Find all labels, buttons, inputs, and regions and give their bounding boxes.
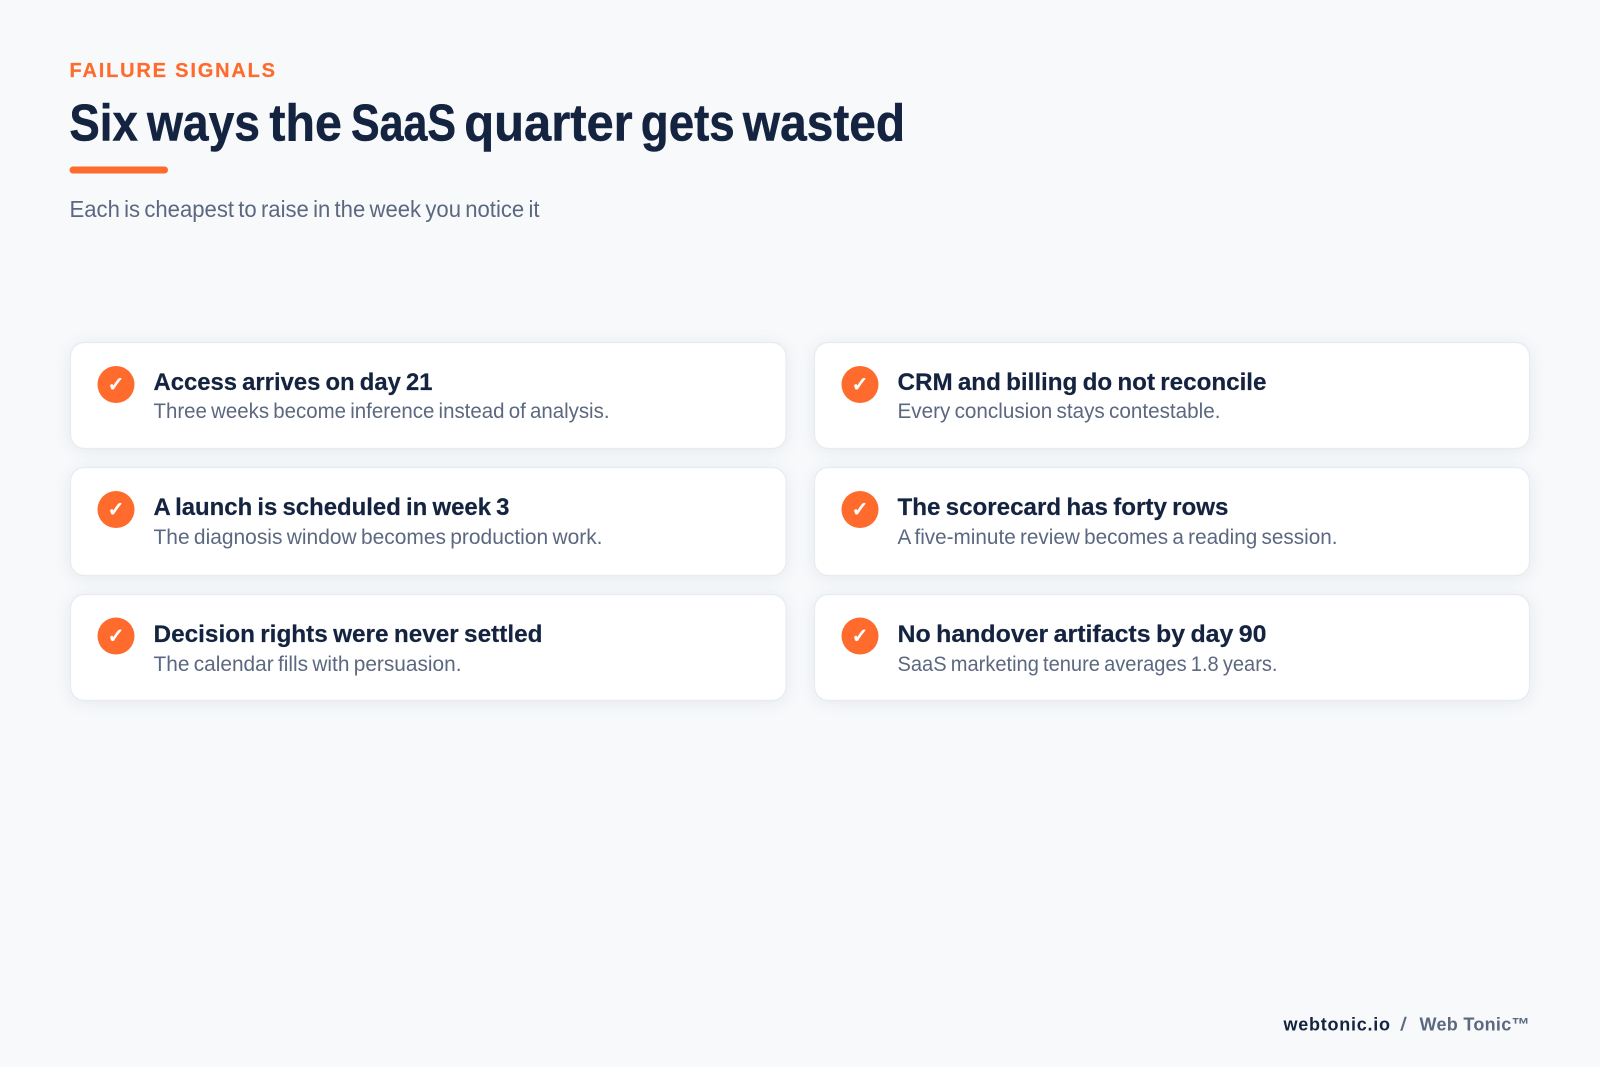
description: The diagnosis window becomes production work. xyxy=(154,526,602,549)
panel: crm and billing xyxy=(814,342,1530,448)
panel: no handover artifacts xyxy=(814,594,1530,700)
footer: webtonic.io xyxy=(1282,1014,1390,1034)
heading: The scorecard has forty rows xyxy=(898,494,1228,521)
footer xyxy=(1282,1014,1530,1034)
icon: check xyxy=(98,618,134,654)
heading: Access arrives on day 21 xyxy=(154,369,432,396)
title: quarter xyxy=(464,94,633,152)
icon: check xyxy=(842,491,878,528)
subtitle: Each is cheapest to raise in the week you notice it xyxy=(70,196,540,222)
heading: A launch is scheduled in week 3 xyxy=(154,494,510,521)
icon: check: ✓ xyxy=(852,372,868,396)
icon: check: ✓ xyxy=(108,624,124,648)
icon: check xyxy=(842,618,878,654)
title: SaaS xyxy=(351,94,456,152)
panel: decision rights xyxy=(70,594,786,700)
icon: check xyxy=(98,366,134,403)
title: gets xyxy=(641,94,735,152)
eyebrow: FAILURE SIGNALS xyxy=(70,60,275,82)
icon: check: ✓ xyxy=(852,624,868,648)
description: The calendar fills with persuasion. xyxy=(154,653,462,676)
description: Three weeks become inference instead of analysis. xyxy=(154,400,610,423)
icon: check: ✓ xyxy=(108,497,124,521)
footer: Web Tonic™ xyxy=(1420,1014,1530,1034)
header xyxy=(69,60,905,222)
description: SaaS marketing tenure averages 1.8 years. xyxy=(898,653,1278,676)
icon: check xyxy=(98,491,134,528)
heading: No handover artifacts by day 90 xyxy=(898,621,1266,648)
panel: launch in week 3 xyxy=(70,468,786,576)
title: Six xyxy=(69,94,138,152)
heading: CRM and billing do not reconcile xyxy=(898,369,1266,396)
title: ways xyxy=(146,94,260,152)
panel: scorecard forty rows xyxy=(814,468,1530,576)
accent underline xyxy=(70,166,168,174)
icon: check: ✓ xyxy=(852,497,868,521)
footer: / xyxy=(1400,1014,1406,1034)
description: A five-minute review becomes a reading session. xyxy=(898,526,1338,549)
title: the xyxy=(269,94,342,152)
title: wasted xyxy=(742,94,905,152)
icon: check: ✓ xyxy=(108,372,124,396)
heading: Decision rights were never settled xyxy=(154,621,542,648)
panel: access arrives on day 21 xyxy=(70,342,786,448)
description: Every conclusion stays contestable. xyxy=(898,400,1220,423)
icon: check xyxy=(842,366,878,403)
